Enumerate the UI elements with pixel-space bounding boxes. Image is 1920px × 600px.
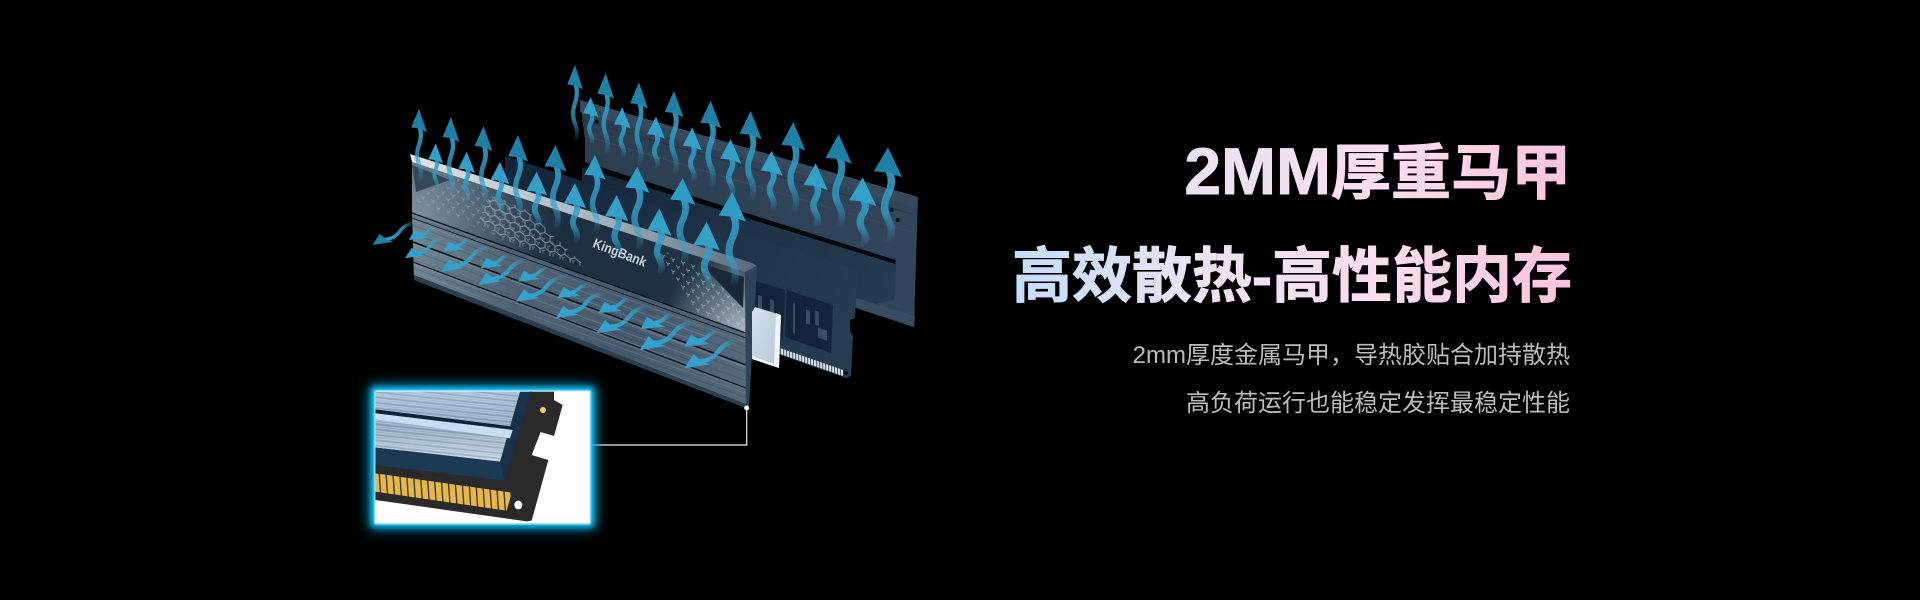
honeycomb pattern left <box>414 177 585 268</box>
gold-finger contact strip <box>780 348 843 376</box>
DRAM chip right <box>785 290 833 353</box>
thermal pad <box>752 307 781 368</box>
heading line 2: 高效散热-高性能内存 <box>1012 243 1572 310</box>
memory PCB <box>505 156 857 378</box>
detail inset: close-up of module corner <box>370 386 595 528</box>
connector line from module corner to detail inset <box>591 406 749 445</box>
brand logo: KingBank <box>591 235 649 270</box>
heading line 1: 2MM厚重马甲 <box>1184 134 1571 208</box>
airflow arrows: front module, short row <box>428 143 720 291</box>
product illustration: exploded memory module <box>410 100 918 408</box>
bright top edge <box>410 154 757 272</box>
cut-out window right <box>700 263 744 308</box>
honeycomb pattern right <box>650 245 745 330</box>
right edge bar <box>745 266 757 408</box>
description line 2: 高负荷运行也能稳定发挥最稳定性能 <box>1186 390 1570 417</box>
airflow arrows: front module, tall row <box>411 109 746 287</box>
airflow arrows: rear module, back row <box>567 65 902 243</box>
brushed lower panel <box>412 213 746 408</box>
airflow arrows: rear module, front row <box>583 97 876 246</box>
DRAM chip left <box>750 280 785 340</box>
front heat spreader <box>410 154 757 408</box>
cut-out window left <box>412 165 450 192</box>
description line 1: 2mm厚度金属马甲，导热胶贴合加持散热 <box>1133 342 1570 369</box>
airflow arrows: sideways across the heat spreader <box>372 223 737 368</box>
rear heat spreader <box>580 100 918 327</box>
